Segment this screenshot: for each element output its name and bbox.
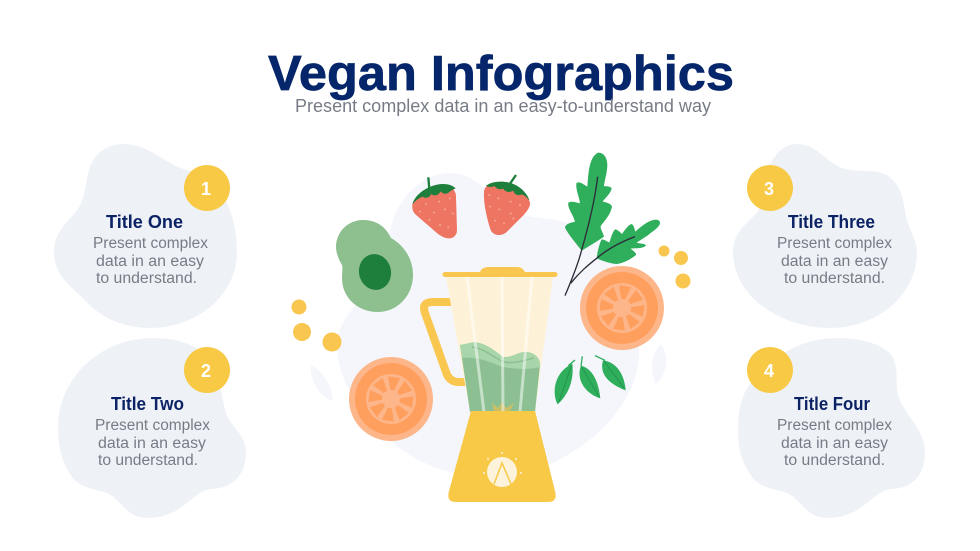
blade: [492, 402, 514, 411]
badge 2: 2: [201, 361, 211, 381]
body text: data in an easy: [98, 435, 206, 452]
handle: [424, 302, 467, 382]
panel: title three: [733, 144, 917, 328]
panel: title four: [738, 338, 925, 518]
body text: data in an easy: [781, 253, 888, 270]
blob three: [733, 144, 917, 328]
knob: [483, 452, 522, 487]
heading: Title One: [106, 212, 183, 232]
blob two: [58, 338, 246, 518]
liquid: [460, 342, 540, 412]
yellow berries left: [292, 300, 342, 352]
body text: to understand.: [98, 452, 198, 469]
panel: title one: [54, 144, 237, 328]
side leaf right: [652, 344, 666, 384]
leafy branch: [565, 153, 660, 296]
body text: Present complex: [95, 417, 210, 434]
title: Vegan Infographics: [268, 47, 734, 101]
panel: title two: [58, 338, 246, 518]
yellow berries right: [658, 246, 690, 288]
jar: [446, 277, 553, 412]
badge 2: [184, 347, 230, 393]
strawberry right: [484, 175, 530, 235]
body text: to understand.: [784, 270, 885, 287]
body text: [93, 235, 208, 287]
heading: Title Three: [788, 212, 875, 232]
body text: [95, 417, 210, 469]
body text: Present complex: [93, 235, 208, 252]
body text: [777, 417, 892, 469]
body text: to understand.: [784, 452, 885, 469]
body text: [777, 235, 892, 287]
badge 4: 4: [764, 361, 774, 381]
badge 3: 3: [764, 179, 774, 199]
strawberry left: [412, 177, 457, 238]
body text: to understand.: [96, 270, 197, 287]
orange slice left: [349, 357, 433, 441]
side leaf left: [311, 365, 333, 401]
badge 4: [747, 347, 793, 393]
blob four: [738, 338, 925, 518]
blob one: [54, 144, 237, 328]
avocado: [336, 220, 413, 312]
liquid swirl: [472, 347, 534, 363]
strawberries: [412, 175, 530, 238]
subtitle: Present complex data in an easy-to-understand way: [295, 96, 711, 116]
small green leaves: [555, 356, 626, 404]
badge 3: [747, 165, 793, 211]
central blender illustration: [292, 153, 690, 502]
badge 1: 1: [201, 179, 211, 199]
glass highlights: [467, 277, 532, 412]
lid: [442, 267, 558, 277]
body text: Present complex: [777, 235, 892, 252]
background blob: [337, 173, 639, 477]
blender: [424, 267, 558, 502]
body text: Present complex: [777, 417, 892, 434]
liquid surface: [460, 342, 540, 369]
heading: Title Four: [794, 394, 870, 414]
body text: data in an easy: [96, 253, 204, 270]
body text: data in an easy: [781, 435, 888, 452]
badge 1: [184, 165, 230, 211]
base: [448, 411, 556, 502]
orange slice right: [580, 266, 664, 350]
heading: Title Two: [111, 394, 184, 414]
